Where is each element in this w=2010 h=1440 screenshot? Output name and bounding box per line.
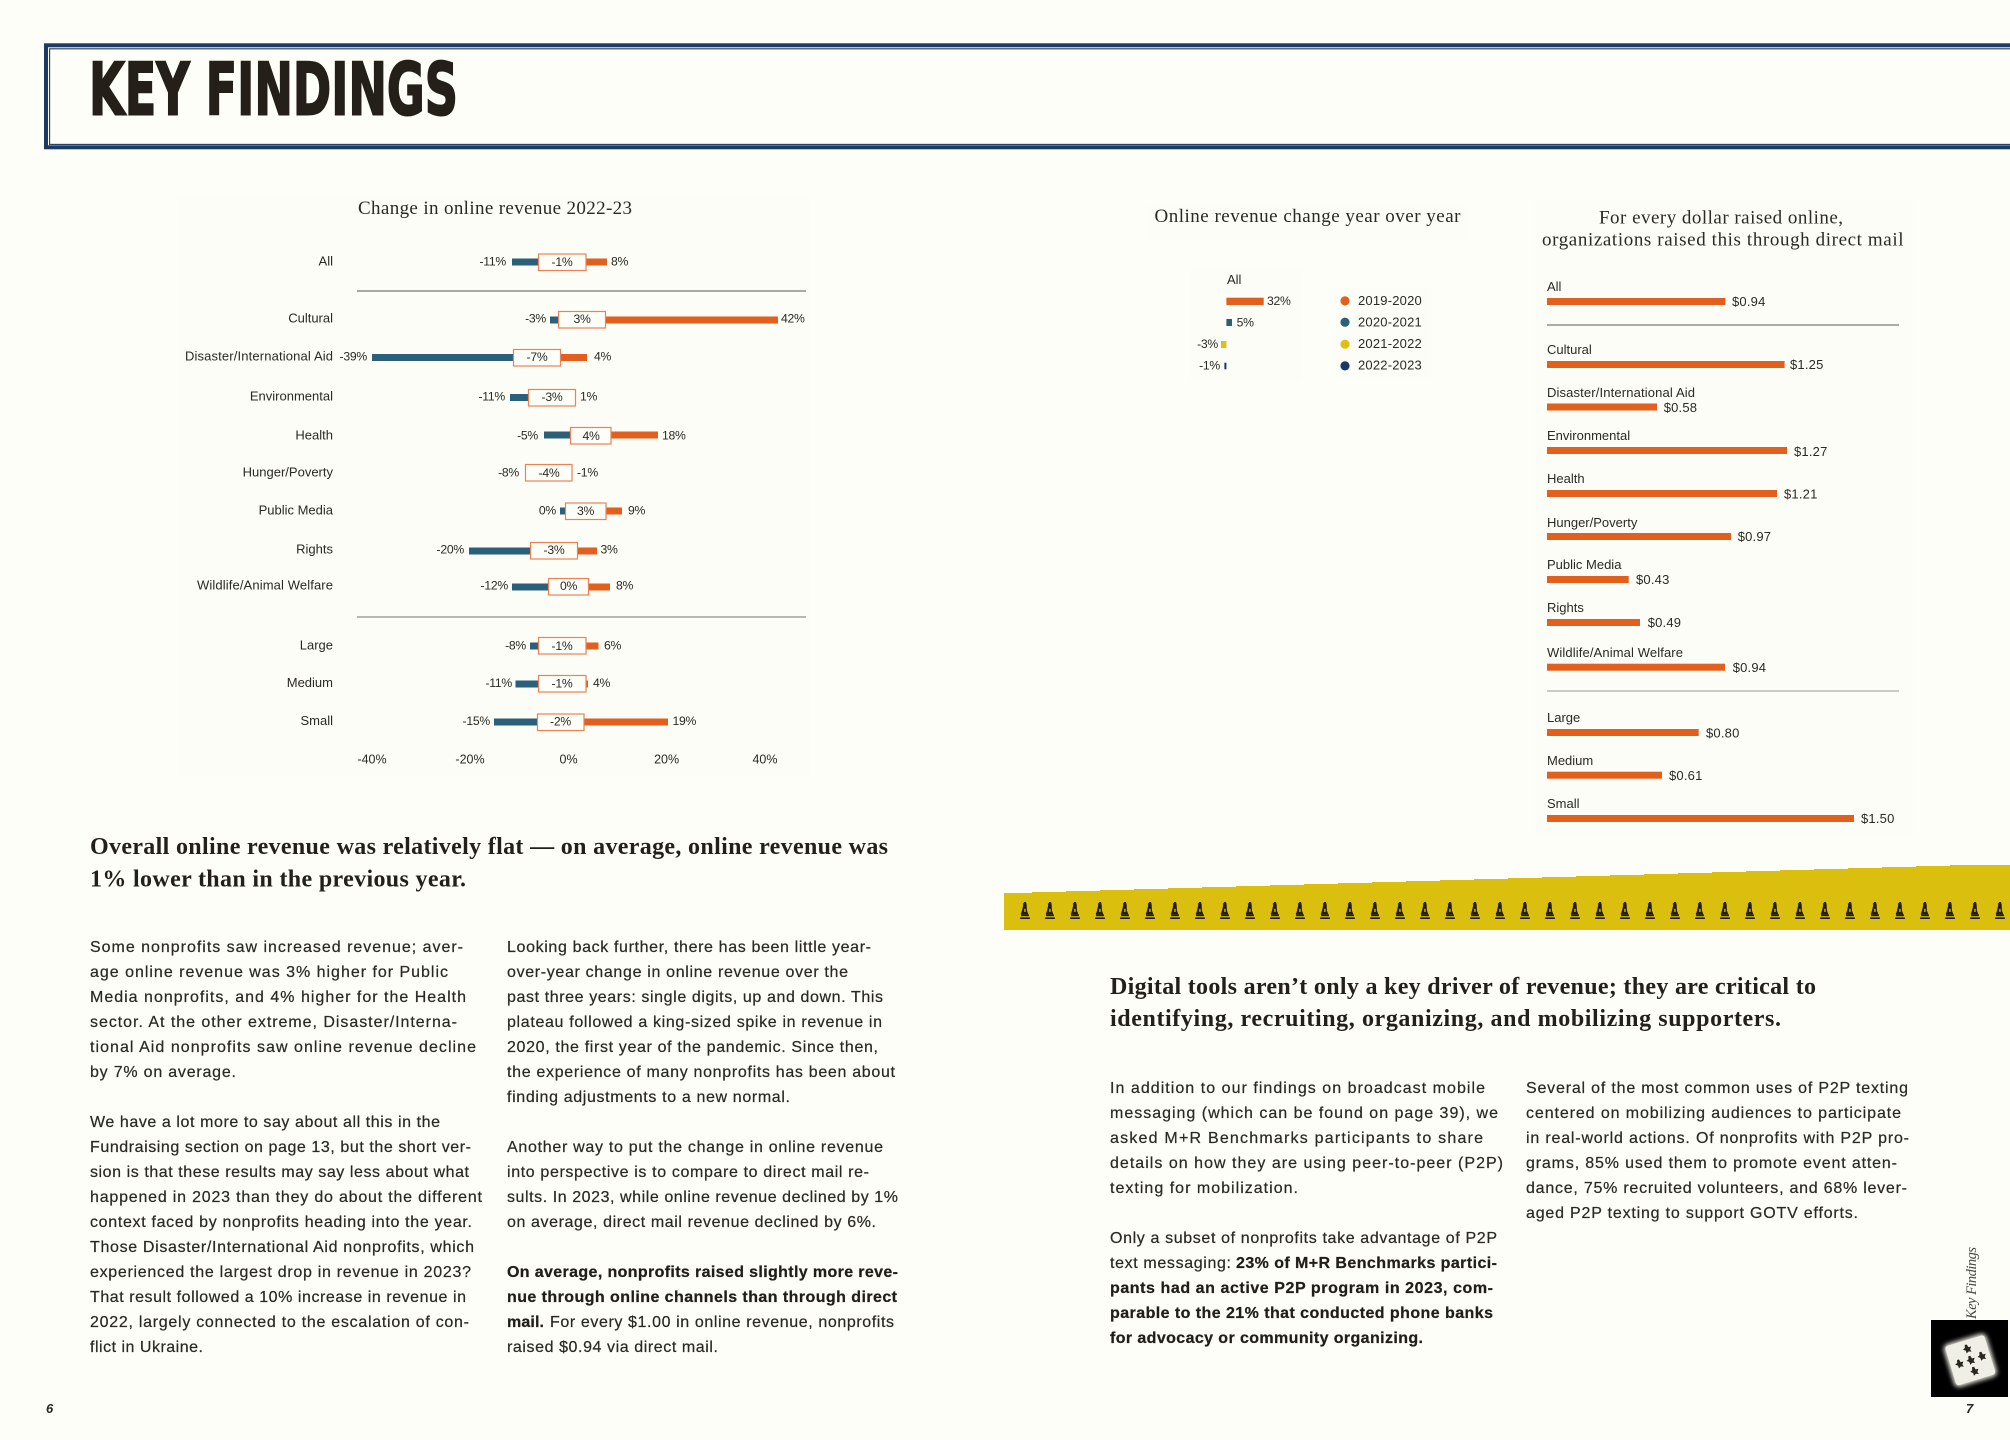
row: Hunger/Poverty: -8% [498, 466, 519, 480]
x axis labels: 40% [752, 752, 778, 766]
bar: Environmental: $1.27 [1794, 444, 1828, 459]
text column: left page, column two: past three years: single digits, up and down. This [507, 989, 883, 1006]
row: Environmental: -3% [542, 390, 563, 404]
text column: left page, column one: by 7% on average. [90, 1064, 236, 1081]
text column: left page, column one: tional Aid nonprofits saw online revenue decline [90, 1039, 476, 1056]
bar: Hunger/Poverty: Hunger/Poverty [1547, 515, 1638, 530]
bar: Health [1547, 471, 1818, 502]
row: Rights: -20% [437, 543, 464, 557]
bar: Rights: Rights [1547, 600, 1584, 615]
text column: right page, column one: for advocacy or community organizing. [1110, 1330, 1423, 1347]
text column: left page, column one: flict in Ukraine. [90, 1339, 203, 1356]
bar: Public Media: Public Media [1547, 557, 1622, 572]
text column: right page, column one: pants had an active P2P program in 2023, com- [1110, 1280, 1493, 1297]
bar: All: $0.94 [1732, 294, 1766, 309]
bar: Public Media: $0.43 [1636, 572, 1670, 587]
bar: Large: Large [1547, 710, 1580, 725]
bar: Large: $0.80 [1706, 726, 1740, 741]
row: Hunger/Poverty: Hunger/Poverty [243, 464, 333, 480]
row: Public Media: 9% [628, 504, 646, 518]
text column: right page, column one: text messaging: [1110, 1255, 1231, 1272]
row: Cultural: Cultural [288, 311, 333, 326]
text column: left page, column one: Those Disaster/International Aid nonprofits, which [90, 1239, 474, 1256]
bar: Medium: $0.61 [1669, 768, 1703, 783]
text column: left page, column one: sector. At the other extreme, Disaster/Interna- [90, 1014, 457, 1031]
row: Large: -1% [552, 639, 573, 653]
heading: digital tools [1110, 974, 1816, 1032]
heading: digital tools: identifying, recruiting, organizing, and mobilizing supporters. [1110, 1006, 1781, 1032]
text column: left page, column one: Fundraising section on page 13, but the short ver- [90, 1139, 471, 1156]
row: All: -11% [479, 254, 506, 268]
page number 6: 6 [46, 1401, 54, 1416]
text column: left page, column two: finding adjustments to a new normal. [507, 1089, 790, 1106]
text column: right page, column one: messaging (which can be found on page 39), we [1110, 1105, 1498, 1122]
bar: Wildlife/Animal Welfare: Wildlife/Animal Welfare [1547, 645, 1683, 660]
text column: left page, column one: That result followed a 10% increase in revenue in [90, 1289, 466, 1306]
chart title [1542, 208, 1904, 250]
row: Small: Small [300, 713, 333, 728]
row: Cultural: 3% [573, 312, 591, 326]
text column: left page, column one: Media nonprofits, and 4% higher for the Health [90, 989, 466, 1006]
row: Hunger/Poverty: -1% [577, 466, 598, 480]
text column: left page, column one: Some nonprofits saw increased revenue; aver- [90, 939, 463, 956]
row: All: 8% [611, 254, 629, 268]
text column: left page, column one: experienced the largest drop in revenue in 2023? [90, 1264, 471, 1281]
row: Cultural: -3% [525, 312, 546, 326]
heading: overall online revenue: Overall online revenue was relatively flat — on average, online revenue was [90, 834, 888, 860]
row: Large: Large [300, 638, 333, 652]
text column: left page, column two: into perspective is to compare to direct mail re- [507, 1164, 869, 1181]
text column: right page, column two: Several of the most common uses of P2P texting [1526, 1080, 1908, 1097]
chart title: Change in online revenue 2022-23 [358, 198, 632, 219]
section label: key findings: Key Findings [1964, 1247, 1980, 1320]
mini bar chart: -1% [1199, 358, 1220, 372]
legend: 2022-2023 [1358, 358, 1422, 372]
heading: digital tools: Digital tools aren’t only a key driver of revenue; they are critical to [1110, 974, 1816, 1000]
bar: All: All [1547, 279, 1562, 294]
row: Hunger/Poverty: -4% [539, 466, 560, 480]
row: Health: Health [295, 428, 333, 442]
row: Disaster/International Aid: -39% [340, 350, 367, 364]
bar: Wildlife/Animal Welfare [1547, 645, 1766, 675]
row: Wildlife/Animal Welfare: 8% [616, 579, 634, 593]
bar: Health: Health [1547, 471, 1585, 486]
legend: 2020-2021 [1358, 314, 1422, 330]
bar: Small: $1.50 [1861, 811, 1895, 826]
text column: left page, column two: plateau followed a king-sized spike in revenue in [507, 1014, 882, 1031]
bar: Medium: Medium [1547, 753, 1593, 768]
text column: right page, column two: aged P2P texting to support GOTV efforts. [1526, 1205, 1858, 1222]
panel: online revenue change year over year [1147, 205, 1467, 382]
row: All: -1% [552, 255, 573, 269]
row: All [319, 254, 629, 270]
text column: right page, column one: 23% of M+R Benchmarks partici- [1236, 1255, 1497, 1272]
bar: Wildlife/Animal Welfare: $0.94 [1733, 660, 1766, 675]
row: Small: 19% [672, 714, 697, 728]
row: Medium: -1% [552, 676, 573, 690]
bar: Medium [1547, 753, 1703, 783]
x axis labels: -20% [455, 752, 485, 766]
row: Rights [296, 542, 618, 559]
mini bar chart: All [1227, 272, 1242, 287]
bar: Cultural: $1.25 [1790, 357, 1824, 372]
row: Wildlife/Animal Welfare: 0% [560, 579, 577, 593]
text column: left page, column one: age online revenue was 3% higher for Public [90, 964, 448, 981]
header frame [46, 45, 2010, 147]
row: Health: 18% [662, 428, 686, 442]
heading: overall online revenue [90, 834, 888, 892]
bar: Cultural [1547, 342, 1824, 372]
title: KEY FINDINGS [89, 48, 458, 132]
row: Medium [287, 675, 611, 692]
bar: Environmental [1547, 428, 1828, 459]
text column: right page, column one [1110, 1080, 1503, 1347]
text column: right page, column two: grams, 85% used them to promote event atten- [1526, 1155, 1897, 1172]
text column: left page, column two: For every $1.00 in online revenue, nonprofits [550, 1314, 894, 1331]
row: Wildlife/Animal Welfare: Wildlife/Animal Welfare [197, 578, 333, 593]
heading: overall online revenue: 1% lower than in the previous year. [90, 866, 466, 892]
text column: left page, column two: on average, direct mail revenue declined by 6%. [507, 1214, 876, 1231]
row: Rights: Rights [296, 542, 333, 557]
text column: right page, column one: texting for mobilization. [1110, 1180, 1298, 1197]
text column: right page, column one: details on how they are using peer-to-peer (P2P) [1110, 1155, 1503, 1172]
row: Public Media [259, 503, 646, 520]
text column: right page, column two: dance, 75% recruited volunteers, and 68% lever- [1526, 1180, 1907, 1197]
text column: left page, column two: 2020, the first year of the pandemic. Since then, [507, 1039, 878, 1056]
text column: right page, column two [1526, 1080, 1909, 1222]
bar: Hunger/Poverty [1547, 515, 1771, 544]
row: Large [300, 638, 622, 654]
row: Small: -2% [550, 715, 571, 729]
row: Disaster/International Aid: -7% [527, 350, 548, 364]
panel: direct mail per online dollar chart [1535, 200, 1913, 835]
legend: 2019-2020 [1358, 293, 1422, 308]
row: Environmental: 1% [580, 390, 598, 404]
panel: change in online revenue chart [178, 197, 810, 775]
x axis labels [357, 752, 778, 766]
row: Environmental: -11% [478, 390, 505, 404]
text column: left page, column two: mail. [507, 1314, 544, 1331]
yellow banner with chess pieces [1004, 865, 2010, 930]
row: Wildlife/Animal Welfare: -12% [481, 579, 508, 593]
row: Public Media: 3% [577, 504, 594, 518]
x axis labels: 0% [560, 752, 578, 766]
row: Hunger/Poverty [243, 464, 598, 481]
row: Small [300, 713, 697, 730]
x axis labels: 20% [654, 752, 679, 766]
row: Environmental: Environmental [250, 389, 333, 404]
bar: Health: $1.21 [1784, 487, 1818, 502]
row: Disaster/International Aid [185, 349, 612, 366]
row: Small: -15% [463, 714, 490, 728]
row: Large: -8% [505, 638, 526, 652]
text column: right page, column two: in real-world actions. Of nonprofits with P2P pro- [1526, 1130, 1909, 1147]
bar: Disaster/International Aid: $0.58 [1664, 400, 1697, 415]
bar: Hunger/Poverty: $0.97 [1738, 529, 1771, 544]
chart title: organizations raised this through direct mail [1542, 230, 1904, 250]
text column: left page, column two: sults. In 2023, while online revenue declined by 1% [507, 1189, 898, 1206]
page number 7: 7 [1966, 1401, 1974, 1416]
row: Disaster/International Aid: Disaster/International Aid [185, 349, 333, 364]
bar: Small: Small [1547, 796, 1580, 811]
row: All: All [319, 254, 333, 268]
legend [1340, 293, 1422, 372]
text column: left page, column one [90, 939, 483, 1356]
text column: left page, column two: On average, nonprofits raised slightly more reve- [507, 1264, 898, 1281]
row: Public Media: Public Media [259, 503, 334, 518]
row: Medium: Medium [287, 675, 333, 690]
text column: right page, column one: asked M+R Benchmarks participants to share [1110, 1130, 1483, 1147]
row: Disaster/International Aid: 4% [594, 350, 612, 364]
row: Health: 4% [582, 429, 600, 443]
text column: left page, column one: happened in 2023 than they do about the different [90, 1189, 483, 1206]
text column: left page, column two: over-year change in online revenue over the [507, 964, 848, 981]
row: Cultural: 42% [781, 312, 805, 326]
text column: left page, column two: nue through online channels than through direct [507, 1289, 898, 1306]
text column: right page, column one: In addition to our findings on broadcast mobile [1110, 1080, 1485, 1097]
text column: left page, column one: 2022, largely connected to the escalation of con- [90, 1314, 469, 1331]
row: Medium: 4% [593, 676, 611, 690]
row: Medium: -11% [485, 676, 512, 690]
text column: left page, column two: the experience of many nonprofits has been about [507, 1064, 896, 1081]
bar: Environmental: Environmental [1547, 428, 1630, 443]
mini bar chart: 5% [1237, 316, 1254, 330]
row: Health: -5% [517, 428, 538, 442]
bar: Disaster/International Aid: Disaster/International Aid [1547, 385, 1695, 400]
text column: left page, column one: sion is that these results may say less about what [90, 1164, 470, 1181]
row: Cultural [288, 311, 805, 328]
text column: left page, column two: Another way to put the change in online revenue [507, 1139, 883, 1156]
bar: Large [1547, 710, 1740, 741]
text column: right page, column two: centered on mobilizing audiences to participate [1526, 1105, 1901, 1122]
row: Rights: 3% [600, 543, 618, 557]
bar: Cultural: Cultural [1547, 342, 1592, 357]
text column: left page, column two: raised $0.94 via direct mail. [507, 1339, 718, 1356]
bar: Rights [1547, 600, 1681, 630]
bar: All [1547, 279, 1766, 309]
bar: Small [1547, 796, 1895, 826]
chart title: For every dollar raised online, [1599, 208, 1843, 228]
row: Environmental [250, 389, 598, 406]
row: Large: 6% [604, 638, 622, 652]
bar: Rights: $0.49 [1648, 615, 1681, 630]
text column: right page, column one: parable to the 21% that conducted phone banks [1110, 1305, 1493, 1322]
x axis labels: -40% [357, 752, 387, 766]
text column: left page, column one: context faced by nonprofits heading into the year. [90, 1214, 472, 1231]
chart title: Online revenue change year over year [1154, 206, 1461, 227]
row: Wildlife/Animal Welfare [197, 578, 634, 595]
mini bar chart: -3% [1197, 337, 1218, 351]
row: Rights: -3% [544, 543, 565, 557]
text column: right page, column one: Only a subset of nonprofits take advantage of P2P [1110, 1230, 1497, 1247]
row: Health [295, 428, 686, 444]
text column: left page, column one: We have a lot more to say about all this in the [90, 1114, 440, 1131]
row: Public Media: 0% [539, 504, 556, 518]
bar: Disaster/International Aid [1547, 385, 1697, 415]
mini bar chart: 32% [1267, 294, 1291, 308]
bar: Public Media [1547, 557, 1670, 587]
icon: dice on black square [1931, 1320, 2008, 1397]
legend: 2021-2022 [1358, 336, 1422, 351]
text column: left page, column two: Looking back further, there has been little year- [507, 939, 871, 956]
text column: left page, column two [507, 939, 898, 1356]
mini bar chart [1197, 272, 1291, 372]
